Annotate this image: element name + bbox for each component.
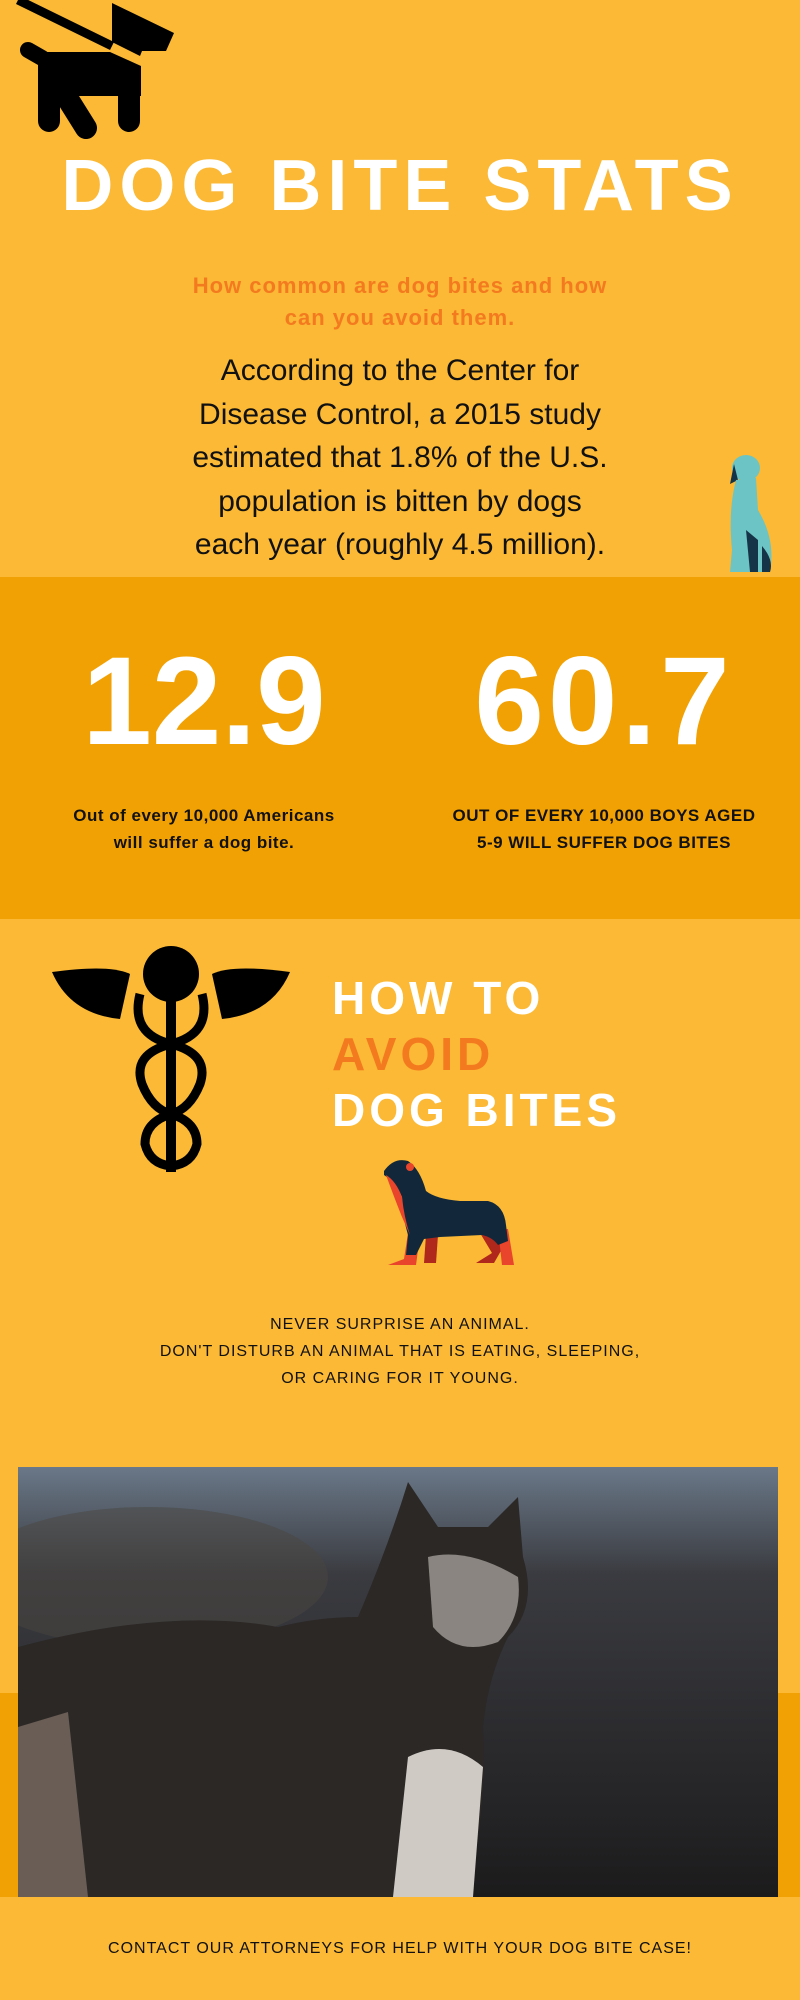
subtitle — [193, 273, 607, 330]
intro paragraph: each year (roughly 4.5 million). — [195, 528, 605, 561]
text: avoidance tips: NEVER SURPRISE AN ANIMAL. — [270, 1316, 530, 1333]
icon: rottweiler — [384, 1160, 514, 1265]
photo: husky — [18, 1467, 778, 1897]
intro paragraph: Disease Control, a 2015 study — [199, 398, 601, 430]
stat: 12.9: Out of every 10,000 Americans — [73, 806, 335, 825]
footer: contact: CONTACT OUR ATTORNEYS FOR HELP WITH YOUR DOG BITE CASE! — [108, 1940, 692, 1957]
subtitle: can you avoid them. — [285, 305, 515, 330]
stat: 12.9: will suffer a dog bite. — [114, 833, 294, 852]
heading: how to avoid dog bites — [332, 972, 621, 1136]
intro paragraph: According to the Center for — [221, 354, 579, 387]
darker band behind photo — [0, 1693, 800, 1897]
heading: how to avoid dog bites: HOW TO — [332, 972, 544, 1024]
intro paragraph — [192, 354, 608, 561]
heading: how to avoid dog bites: AVOID — [332, 1028, 494, 1080]
intro paragraph: estimated that 1.8% of the U.S. — [192, 441, 608, 474]
icon: teal sitting dog — [730, 455, 772, 572]
icon: guide dog — [16, 0, 174, 139]
stat: 60.7 — [453, 632, 755, 852]
panel: stats band — [0, 577, 800, 919]
intro paragraph: population is bitten by dogs — [218, 484, 582, 518]
subtitle: How common are dog bites and how — [193, 273, 607, 298]
stat: 12.9: 12.9 — [82, 632, 326, 771]
text: avoidance tips: DON'T DISTURB AN ANIMAL THAT IS EATING, SLEEPING, — [160, 1343, 640, 1360]
title: DOG BITE STATS — [61, 146, 739, 226]
stat: 60.7: OUT OF EVERY 10,000 BOYS AGED — [453, 806, 755, 825]
stat: 12.9 — [73, 632, 335, 852]
text: avoidance tips — [160, 1316, 640, 1387]
heading: how to avoid dog bites: DOG BITES — [332, 1084, 621, 1136]
stat: 60.7: 5-9 WILL SUFFER DOG BITES — [477, 833, 731, 852]
stat: 60.7: 60.7 — [474, 632, 734, 771]
icon: caduceus — [52, 946, 290, 1172]
text: avoidance tips: OR CARING FOR IT YOUNG. — [281, 1370, 519, 1387]
